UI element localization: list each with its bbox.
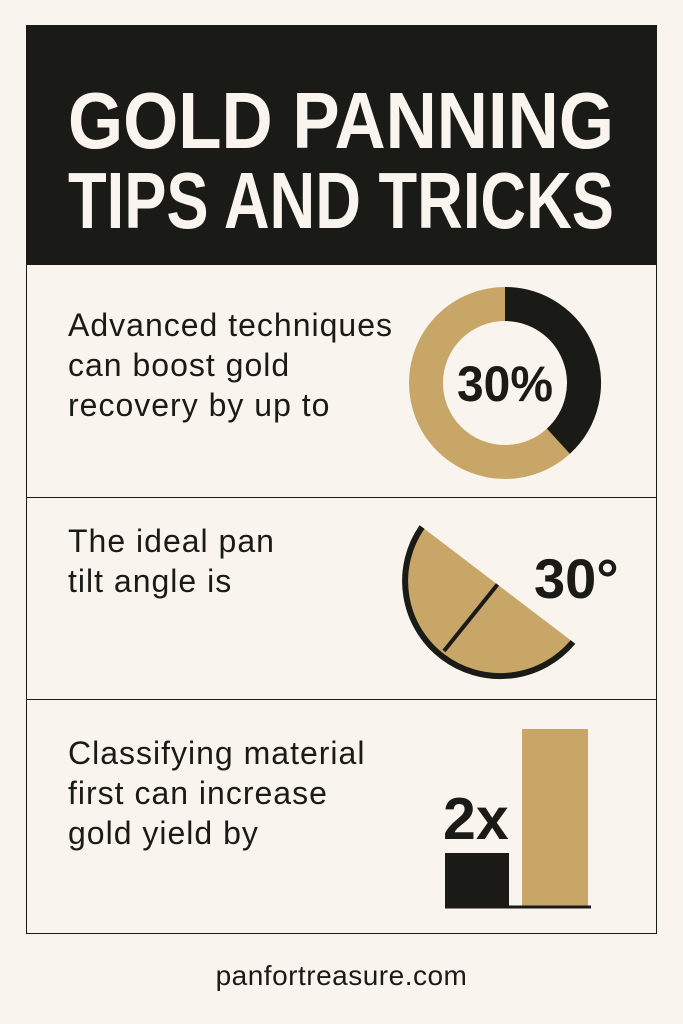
title header [26,25,657,265]
text: recovery: Advanced techniques [68,307,393,343]
text: classifying: first can increase [68,775,328,811]
text: recovery: can boost gold [68,347,290,383]
donut chart 30% [409,287,602,479]
panel: recovery [26,265,657,498]
text: classifying: gold yield by [68,815,259,851]
text: recovery: recovery by up to [68,387,330,423]
text: recovery [68,307,393,423]
label 30 degrees: 30° [534,547,619,610]
bar chart [445,729,591,908]
text: classifying: Classifying material [68,735,365,771]
text: tilt: The ideal pan [68,523,275,559]
text: tilt [68,523,275,599]
panel: tilt angle [26,497,657,700]
text: classifying [68,735,365,851]
text: tilt: tilt angle is [68,563,232,599]
footer url: panfortreasure.com [216,960,467,991]
icon: tilted half pan [402,525,576,680]
panel: classifying [68,729,591,908]
donut chart 30%: 30% [457,356,553,412]
label 2x: 2x [443,786,509,852]
